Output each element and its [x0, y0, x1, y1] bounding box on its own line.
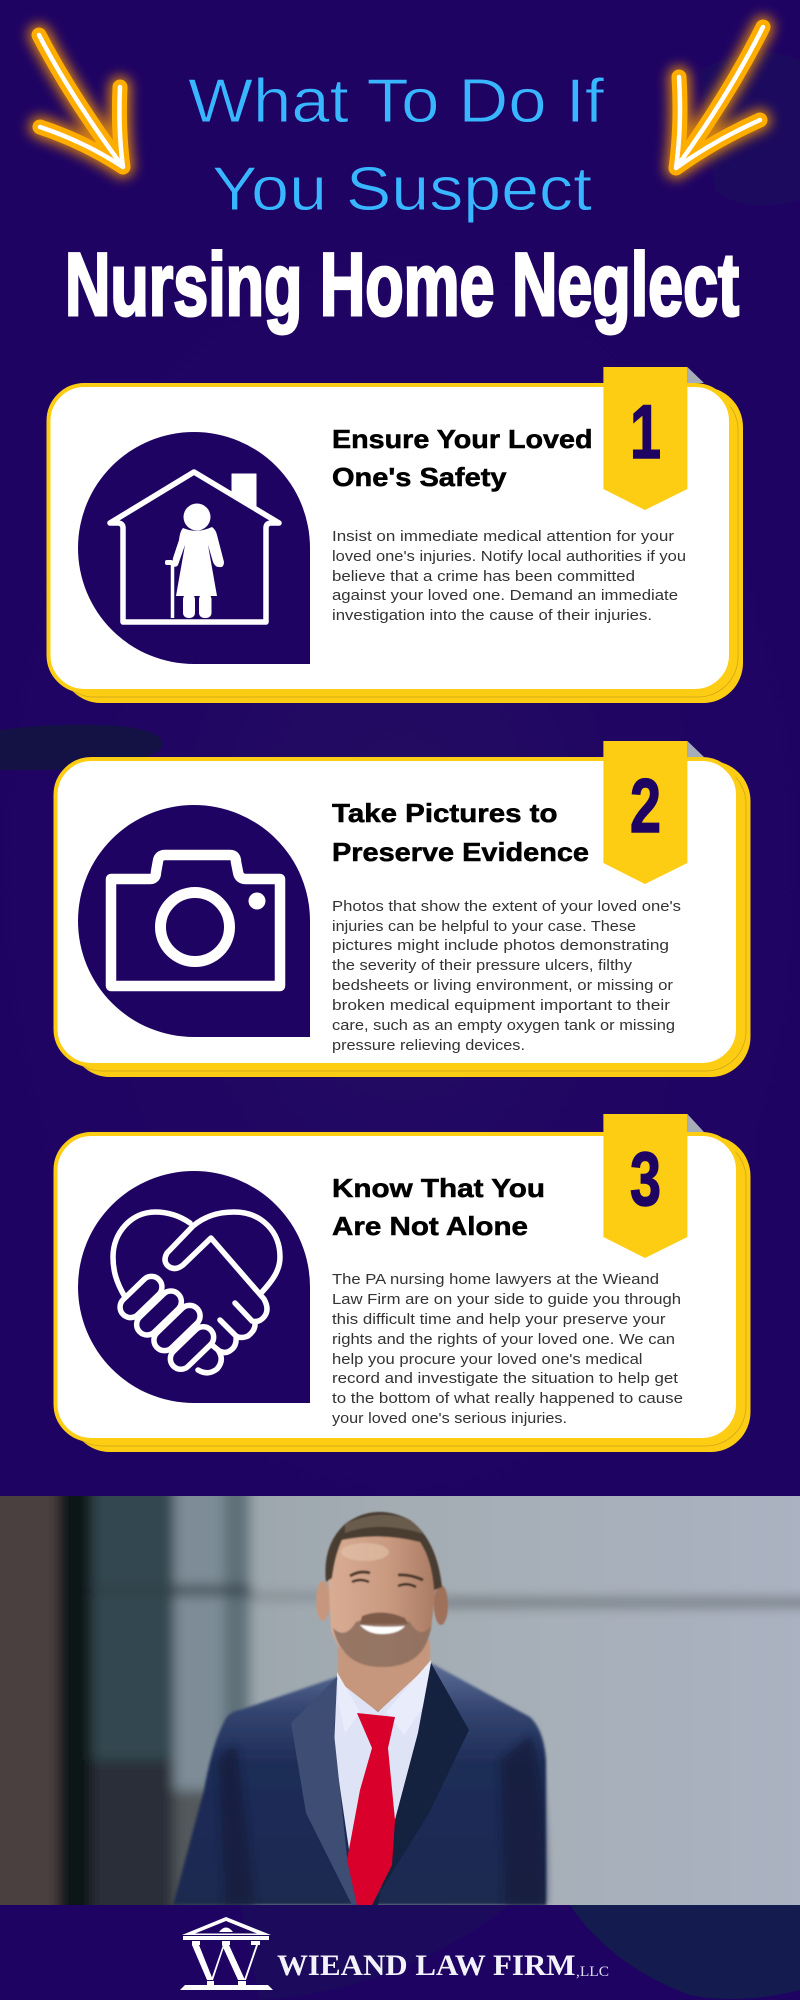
text block 1: believe that a crime has been committed	[332, 569, 635, 585]
left neon arrow	[39, 35, 123, 167]
text block 1: against your loved one. Demand an immediate	[332, 588, 678, 604]
text block 1: investigation into the cause of their injuries.	[332, 608, 652, 624]
text block 3: help you procure your loved one's medical	[332, 1352, 642, 1368]
text block 1	[332, 529, 686, 624]
shirt	[334, 1663, 431, 1850]
ribbon 2	[603, 741, 704, 884]
text block 3	[332, 1272, 683, 1427]
text block 2: pictures might include photos demonstrating	[332, 938, 669, 954]
panel: step 1	[48, 367, 743, 703]
logo mark	[180, 1917, 273, 1990]
title	[65, 67, 739, 334]
title line one: What To Do If	[188, 67, 605, 136]
ribbon 1: 1	[630, 390, 661, 475]
jacket	[173, 1663, 546, 1905]
text block 2: care, such as an empty oxygen tank or missing	[332, 1018, 675, 1034]
heading 3: Know That You	[332, 1173, 545, 1203]
lapels	[291, 1677, 358, 1905]
text block 3: rights and the rights of your loved one. We can	[332, 1332, 675, 1348]
sleeve shadows	[218, 1735, 546, 1905]
heading 1	[332, 424, 592, 492]
heading 2: Take Pictures to	[332, 798, 558, 828]
title line two: You Suspect	[212, 155, 592, 224]
panel: step 3	[56, 1114, 750, 1452]
icon: handshake heart	[78, 1171, 310, 1403]
ribbon 3: 3	[630, 1137, 661, 1222]
text block 2: bedsheets or living environment, or missing or	[332, 978, 673, 994]
ribbon 1	[603, 367, 704, 510]
text block 2: the severity of their pressure ulcers, filthy	[332, 958, 633, 974]
heading 1: Ensure Your Loved	[332, 424, 592, 454]
firm name: WIEAND LAW FIRM	[277, 1949, 576, 1982]
icon: house with elderly person	[78, 432, 310, 664]
heading 2: Preserve Evidence	[332, 837, 589, 867]
icon: camera	[78, 805, 310, 1037]
panel: step 2	[56, 741, 750, 1077]
text block 2: injuries can be helpful to your case. These	[332, 919, 636, 935]
ribbon 2: 2	[630, 764, 661, 849]
heading 1: One's Safety	[332, 462, 507, 492]
text block 2: Photos that show the extent of your loved one's	[332, 899, 681, 915]
photo: attorney	[0, 1480, 800, 1920]
text block 2: broken medical equipment important to their	[332, 998, 670, 1014]
tie	[347, 1713, 395, 1905]
face	[316, 1512, 448, 1667]
text block 3: record and investigate the situation to help get	[332, 1371, 678, 1387]
text block 2: pressure relieving devices.	[332, 1038, 525, 1054]
neck	[338, 1640, 430, 1712]
ribbon 3	[603, 1114, 704, 1258]
heading 2	[332, 798, 589, 867]
text block 1: loved one's injuries. Notify local authorities if you	[332, 549, 686, 565]
text block 3: to the bottom of what really happened to cause	[332, 1391, 683, 1407]
right neon arrow	[676, 27, 763, 168]
text block 3: your loved one's serious injuries.	[332, 1411, 567, 1427]
footer	[0, 1905, 800, 2000]
collar	[337, 1660, 431, 1735]
text block 3: Law Firm are on your side to guide you through	[332, 1292, 681, 1308]
photo background	[0, 1480, 800, 1920]
text block 3: this difficult time and help your preserve your	[332, 1312, 666, 1328]
text block 1: Insist on immediate medical attention for your	[332, 529, 674, 545]
text block 2	[332, 899, 681, 1054]
text block 3: The PA nursing home lawyers at the Wieand	[332, 1272, 659, 1288]
firm suffix: ,LLC	[576, 1964, 609, 1980]
heading 3	[332, 1173, 545, 1241]
heading 3: Are Not Alone	[332, 1211, 528, 1241]
